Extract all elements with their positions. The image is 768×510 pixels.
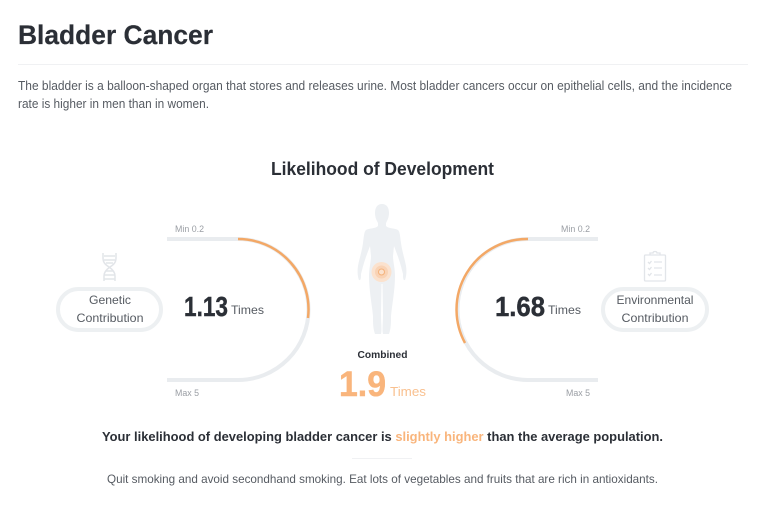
gauge labels: genetic: Min 0.2 <box>175 224 204 235</box>
gauge labels: environmental <box>561 224 590 399</box>
label pill: genetic <box>58 289 161 330</box>
label pill: genetic: Contribution <box>76 311 144 325</box>
advice text: Quit smoking and avoid secondhand smoking. Eat lots of vegetables and fruits that are rich in antioxidants. <box>107 472 658 486</box>
intro paragraph <box>18 79 732 111</box>
gauge: environmental <box>457 239 598 380</box>
conclusion statement: Your likelihood of developing bladder cancer is slightly higher than the average population. <box>102 429 663 444</box>
combined value: 1.9 <box>339 365 386 404</box>
value: environmental <box>495 291 581 322</box>
gauge labels: environmental: Min 0.2 <box>561 224 590 235</box>
icon: dna <box>103 253 116 281</box>
icon: clipboard checklist <box>644 252 666 281</box>
gauge: genetic <box>167 239 309 380</box>
label pill: environmental <box>603 289 707 330</box>
combined value: Times <box>390 384 427 399</box>
value: environmental: Times <box>548 303 581 317</box>
panel: genetic contribution <box>58 224 309 399</box>
combined value <box>339 365 427 404</box>
value: genetic: 1.13 <box>184 291 228 322</box>
title: Bladder Cancer <box>18 20 213 50</box>
value: environmental: 1.68 <box>495 291 545 322</box>
label pill: environmental: Environmental <box>616 293 694 307</box>
panel: environmental contribution <box>457 224 707 399</box>
icon: human body <box>358 204 406 334</box>
value: genetic <box>184 291 264 322</box>
panel: body figure and combined score <box>339 204 427 404</box>
gauge labels: genetic: Max 5 <box>175 388 199 399</box>
value: genetic: Times <box>231 303 264 317</box>
intro paragraph: The bladder is a balloon-shaped organ that stores and releases urine. Most bladder cancers occur on epithelial cells, and the incidence <box>18 79 732 93</box>
label pill: genetic: Genetic <box>89 293 131 307</box>
section heading: Likelihood of Development <box>271 159 494 179</box>
combined label: Combined <box>358 349 408 361</box>
gauge labels: genetic <box>175 224 204 399</box>
gauge labels: environmental: Max 5 <box>566 388 590 399</box>
label pill: environmental: Contribution <box>622 311 688 325</box>
intro paragraph: rate is higher in men than in women. <box>18 97 209 111</box>
